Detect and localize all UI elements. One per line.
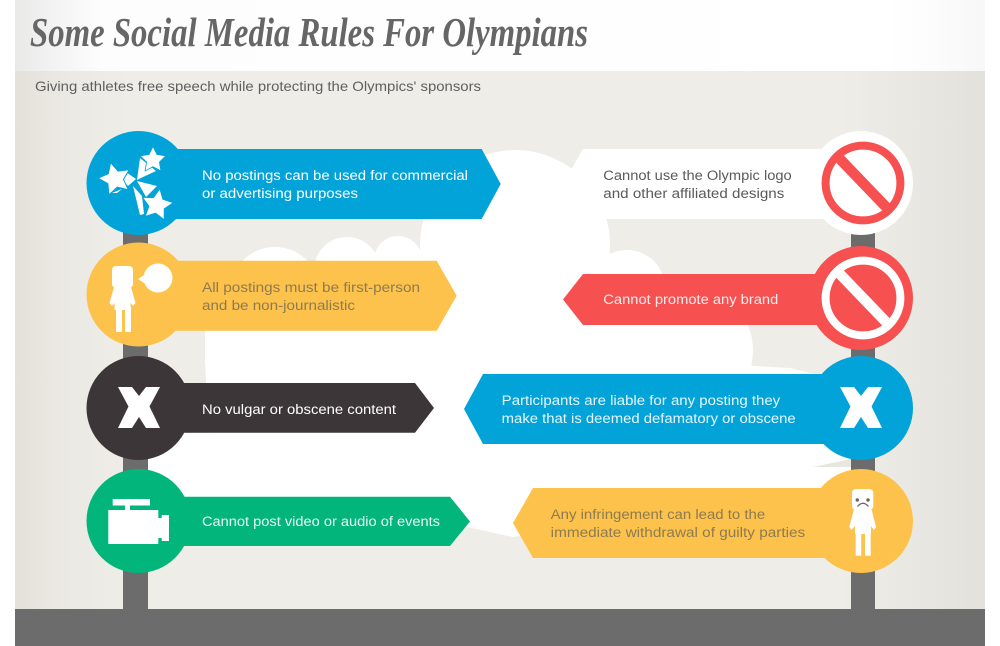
label: or advertising purposes: [202, 186, 358, 202]
icon: X: [840, 387, 882, 428]
arrow banner: [138, 261, 457, 331]
circle badge: [809, 469, 913, 573]
circle badge: [86, 469, 190, 573]
sign: commercial postings: [86, 131, 501, 235]
label: Participants are liable for any posting they: [502, 393, 781, 409]
sign: liable participants: [464, 356, 913, 460]
circle badge: [809, 246, 913, 350]
sign: first-person postings: [86, 242, 457, 346]
background cloud: [148, 150, 851, 537]
label: No vulgar or obscene content: [202, 402, 396, 418]
arrow banner: [563, 274, 861, 325]
header band: [15, 0, 985, 71]
label: Cannot use the Olympic logo: [603, 168, 792, 184]
label: Cannot promote any brand: [603, 292, 778, 308]
right signpost pole: [851, 220, 875, 615]
arrow banner: [138, 497, 470, 546]
icon: sad person: [849, 489, 876, 556]
arrow banner: [563, 149, 861, 219]
cloud shadow wedge: [813, 459, 851, 467]
label: [551, 507, 805, 541]
label: Cannot post video or audio of events: [202, 514, 440, 530]
label: No postings can be used for commercial: [202, 168, 468, 184]
icon: stars: [95, 146, 175, 221]
label: All postings must be first-person: [202, 280, 420, 296]
circle badge: [86, 356, 190, 460]
icon: person with speech bubble: [110, 264, 172, 332]
arrow banner: [513, 488, 861, 558]
sign: Olympic logo: [563, 131, 913, 235]
ground band: [15, 609, 985, 646]
subtitle: Giving athletes free speech while protecting the Olympics' sponsors: [35, 78, 481, 94]
title: Some Social Media Rules For Olympians: [30, 9, 588, 55]
icon: video camera: [108, 499, 169, 544]
arrow banner: [464, 374, 861, 444]
icon: prohibition sign: [826, 261, 900, 335]
circle badge: [86, 131, 190, 235]
label: and be non-journalistic: [202, 298, 355, 314]
circle badge: [86, 242, 190, 346]
label: [202, 280, 420, 314]
arrow banner: [138, 149, 501, 219]
label: [202, 168, 468, 202]
label: immediate withdrawal of guilty parties: [551, 525, 805, 541]
label: [502, 393, 796, 427]
label: and other affiliated designs: [603, 186, 784, 202]
label: make that is deemed defamatory or obscene: [502, 411, 796, 427]
label: Any infringement can lead to the: [551, 507, 765, 523]
sign: promote brand: [563, 246, 913, 350]
left signpost pole: [123, 220, 148, 615]
circle badge: [809, 356, 913, 460]
icon: X: [118, 387, 160, 428]
sign: vulgar content: [86, 356, 434, 460]
arrow banner: [138, 383, 434, 433]
icon: prohibition sign: [826, 146, 900, 220]
circle badge: [809, 131, 913, 235]
sign: video or audio: [86, 469, 470, 573]
sign: infringement: [513, 469, 913, 573]
label: [603, 168, 792, 202]
